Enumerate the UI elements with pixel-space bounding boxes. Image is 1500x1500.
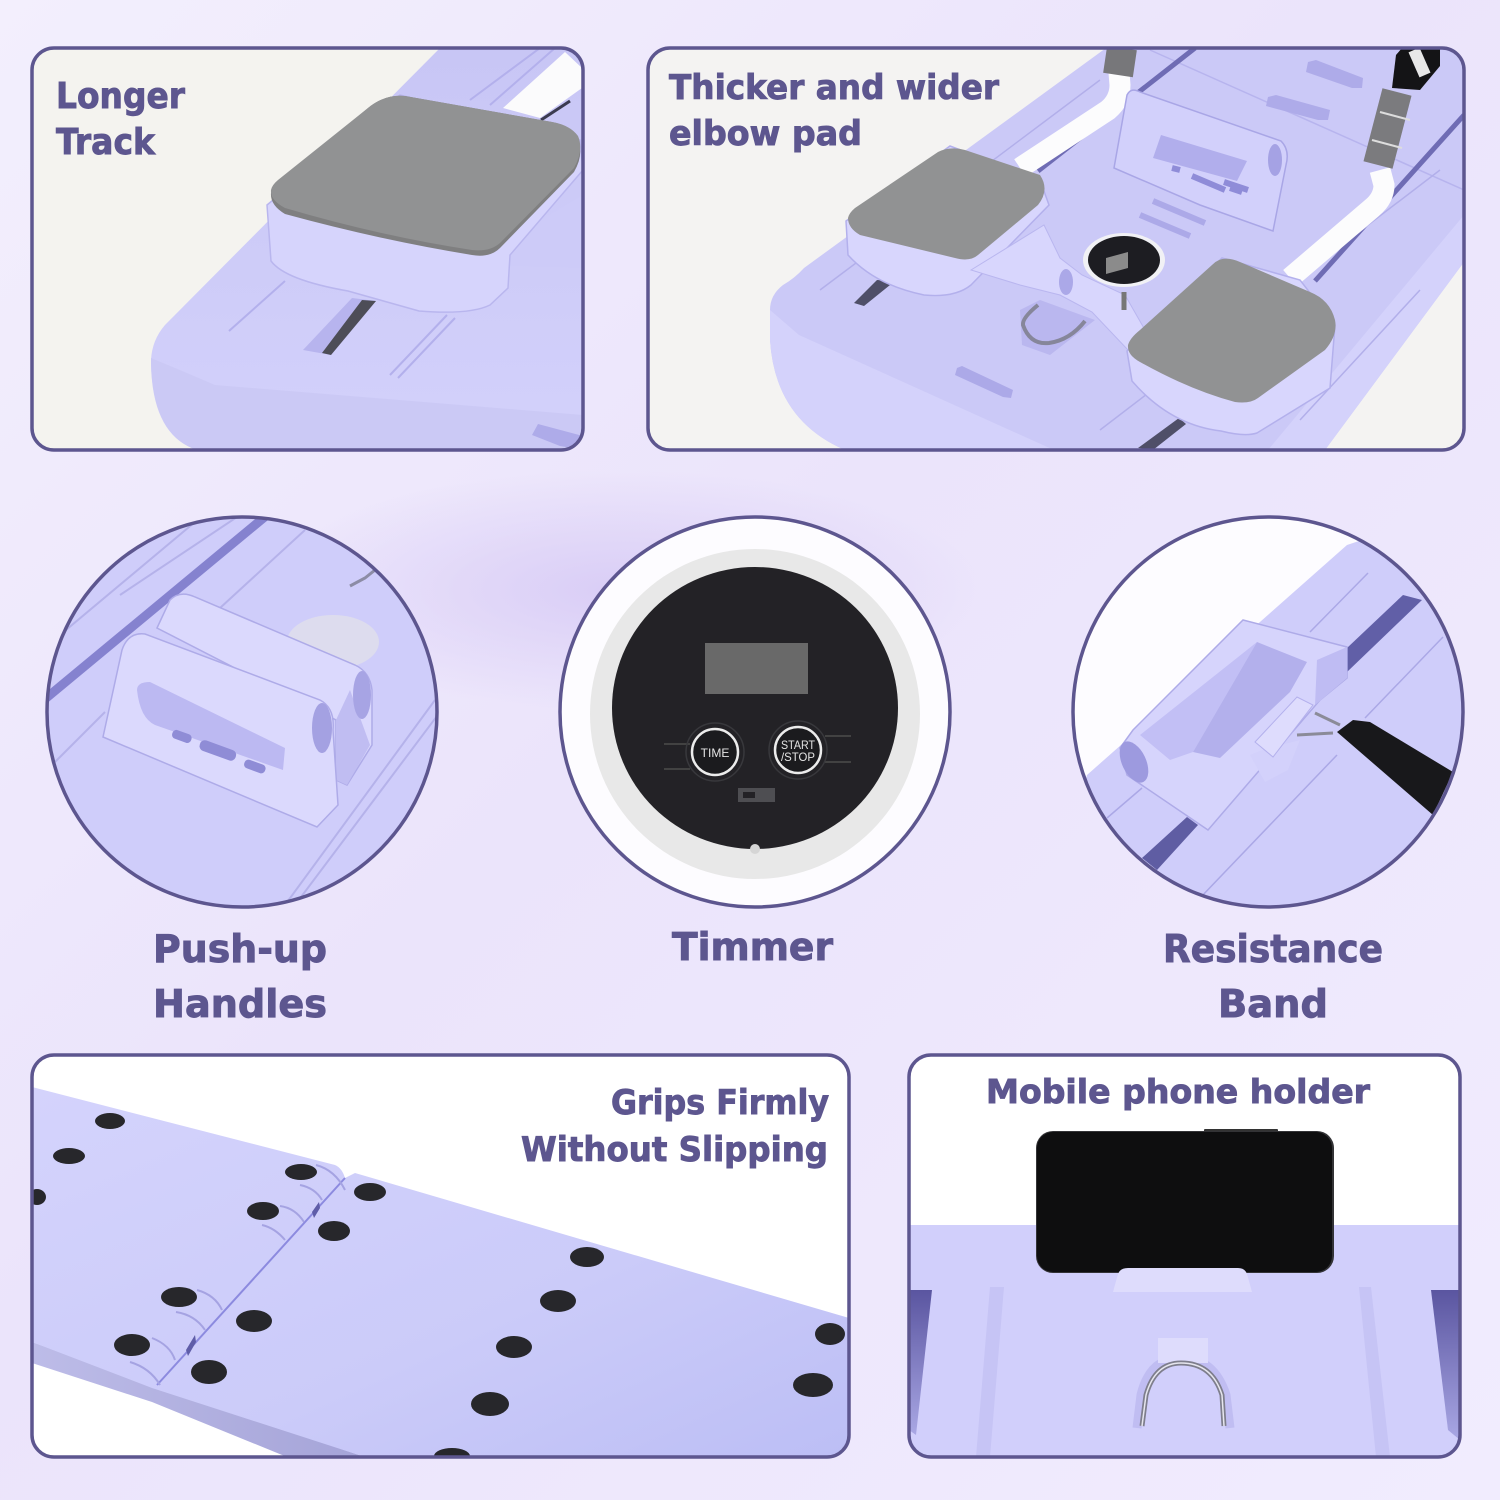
heading: Mobile phone holder — [986, 1072, 1371, 1111]
left pad top — [848, 148, 1045, 259]
back handle — [157, 594, 372, 785]
folded board — [32, 1087, 849, 1457]
band holder — [1120, 620, 1347, 830]
metal hook — [1020, 300, 1095, 355]
tube: right — [1290, 170, 1384, 278]
circle: timer — [560, 517, 950, 907]
rail — [45, 515, 267, 699]
hook tip — [350, 570, 375, 586]
peg — [1122, 292, 1126, 310]
heading: Thicker and wider — [669, 68, 999, 108]
heading: Grips Firmly — [611, 1083, 829, 1123]
track slot — [1347, 595, 1422, 672]
label: push-up handles: Push-up — [153, 927, 327, 971]
foam grips — [1118, 48, 1122, 75]
right pad base — [1127, 258, 1335, 435]
track slots — [854, 280, 890, 306]
slots — [1306, 60, 1363, 88]
heading: Without Slipping — [521, 1130, 828, 1170]
heading — [669, 68, 999, 154]
heading — [56, 76, 185, 163]
tube: left — [1020, 60, 1120, 168]
track slot — [303, 298, 376, 355]
right pad top — [1128, 259, 1336, 402]
button: start stop: START — [781, 738, 816, 752]
board — [770, 48, 1464, 450]
label: push-up handles: Handles — [153, 982, 327, 1026]
panel: grips — [28, 1055, 849, 1464]
battery icon — [738, 788, 775, 802]
panel: longer track — [32, 48, 583, 450]
left pad base — [846, 146, 1049, 296]
track lines — [229, 48, 555, 378]
label: resistance band: Band — [1218, 982, 1328, 1026]
phone — [1036, 1129, 1334, 1273]
button: start stop — [769, 721, 827, 779]
rubber feet — [28, 1113, 845, 1464]
elbow pad base — [267, 95, 583, 312]
circle: push-up handles — [40, 510, 450, 920]
heading — [521, 1083, 829, 1170]
track lines — [976, 1287, 1390, 1457]
phone stand — [1113, 1268, 1252, 1292]
heading: elbow pad — [669, 114, 862, 154]
board — [909, 1225, 1460, 1457]
label: push-up handles — [153, 927, 327, 1026]
wires — [1297, 713, 1340, 735]
button: start stop: /STOP — [781, 750, 815, 764]
button: time — [686, 723, 744, 781]
button: time: TIME — [701, 746, 729, 760]
board side — [32, 1342, 365, 1457]
push-up handle — [1114, 90, 1287, 231]
circle: resistance band — [1065, 510, 1480, 920]
board — [1086, 541, 1462, 906]
label: resistance band: Resistance — [1163, 927, 1383, 971]
small slot — [532, 424, 580, 448]
white tube — [503, 52, 582, 118]
hinge — [157, 1178, 345, 1385]
rails — [1038, 48, 1464, 281]
heading: Track — [56, 122, 156, 163]
timer disc — [287, 615, 379, 669]
label: resistance band — [1163, 927, 1383, 1026]
arm with timer — [971, 225, 1145, 350]
front handle — [103, 634, 338, 827]
timer display — [705, 643, 808, 694]
board — [151, 48, 583, 450]
label: timer: Timmer — [672, 925, 833, 969]
panel: phone holder — [909, 1055, 1460, 1457]
mini timer — [1083, 233, 1165, 287]
metal hook — [1137, 1338, 1230, 1428]
black strap — [1337, 720, 1453, 815]
panel: elbow pad — [648, 48, 1464, 450]
heading: Longer — [56, 76, 185, 117]
pad arm — [506, 195, 583, 268]
elbow pad top — [271, 96, 580, 256]
